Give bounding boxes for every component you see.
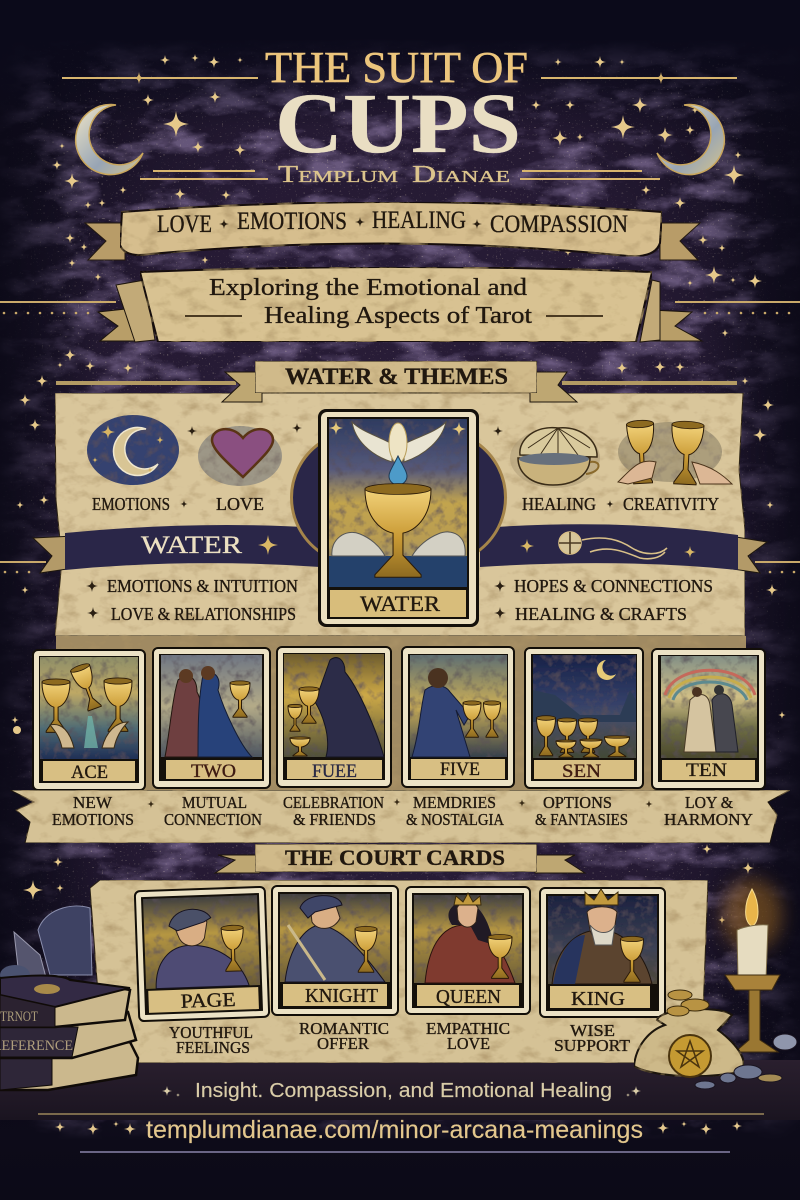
water list right: HEALING & CRAFTS <box>515 604 687 624</box>
card: five: FIVE <box>440 759 480 780</box>
subtitle: templum dianae <box>278 162 510 188</box>
caption: sen: OPTIONS <box>543 793 612 812</box>
title: the suit of: THE SUIT OF <box>265 43 528 92</box>
icon: coin bag with pentacle <box>634 990 744 1077</box>
arch ring behind central card <box>292 443 506 552</box>
caption: page: FEELINGS <box>176 1038 250 1057</box>
caption: five: & NOSTALGIA <box>406 810 505 829</box>
caption: king: SUPPORT <box>554 1036 631 1055</box>
card: fuee <box>277 647 391 787</box>
card clouds <box>332 532 465 556</box>
caption: king <box>554 1021 631 1055</box>
side rules with dots <box>0 301 800 314</box>
card: five <box>402 647 514 787</box>
blue water ribbon <box>33 524 767 573</box>
caption: fuee: CELEBRATION <box>283 793 384 812</box>
icon: stack of books <box>0 976 138 1090</box>
caption: king: WISE <box>570 1021 615 1040</box>
caption: queen: LOVE <box>447 1034 490 1053</box>
card label <box>330 590 466 617</box>
card: two: TWO <box>191 761 236 782</box>
central water card: WATER <box>360 591 440 616</box>
court cards row <box>135 886 665 1021</box>
tagline: Insight. Compassion, and Emotional Healing <box>195 1080 612 1102</box>
water list right: HOPES & CONNECTIONS <box>514 576 713 596</box>
caption: sen: & FANTASIES <box>535 810 628 829</box>
theme words: LOVE <box>157 211 212 238</box>
section header: water and themes <box>222 361 577 402</box>
caption: ten: HARMONY <box>664 810 753 829</box>
banner: subtitle scroll <box>98 267 702 342</box>
icon: knot ornament <box>559 532 667 559</box>
card: knight <box>272 886 398 1015</box>
icon: crystal cluster <box>0 906 92 985</box>
theme labels: LOVE <box>216 494 264 514</box>
theme labels <box>92 423 719 514</box>
caption: ace: EMOTIONS <box>52 810 134 829</box>
caption: knight <box>299 1019 389 1053</box>
card: queen: QUEEN <box>436 986 501 1008</box>
subtitle: templum dianae: Templum <box>278 162 398 188</box>
subtitle: templum dianae: Dianae <box>412 162 510 188</box>
caption: queen <box>426 1019 510 1053</box>
water heading: WATER <box>141 532 242 559</box>
caption strip for numbered cards <box>10 790 790 843</box>
dove <box>352 422 446 463</box>
panel: water and themes <box>55 381 746 792</box>
caption: sen <box>535 793 628 829</box>
caption: page: YOUTHFUL <box>169 1023 253 1042</box>
caption: five <box>406 793 505 829</box>
card: fuee: FUEE <box>312 761 357 782</box>
caption: fuee: & FRIENDS <box>293 810 376 829</box>
caption: ten <box>664 793 753 829</box>
icon: left crescent moon <box>76 105 143 175</box>
water list left <box>86 576 298 624</box>
theme words: COMPASSION <box>490 211 628 238</box>
caption: two <box>164 793 262 829</box>
caption: five: MEMDRIES <box>413 793 496 812</box>
card: knight: KNIGHT <box>305 985 378 1007</box>
numbered cards row <box>33 647 765 790</box>
caption: fuee <box>283 793 384 829</box>
banner: themes ribbon <box>85 202 700 260</box>
book spine text: TRNOT <box>0 1009 38 1025</box>
card: ten <box>652 649 765 789</box>
icon: candle on holder <box>722 879 782 1052</box>
caption: knight: OFFER <box>317 1034 370 1053</box>
icon: heart love <box>198 426 282 486</box>
water list left: EMOTIONS & INTUITION <box>107 576 298 596</box>
caption: ten: LOY & <box>685 793 733 812</box>
theme words: EMOTIONS <box>237 208 347 235</box>
card: ace <box>33 650 145 790</box>
theme labels: HEALING <box>522 494 596 514</box>
card: page <box>135 887 269 1021</box>
footer website link: templumdianae.com/minor-arcana-meanings <box>146 1116 643 1144</box>
title: cups: CUPS <box>275 75 521 171</box>
side rules mid <box>0 561 800 573</box>
card: sen <box>525 648 643 788</box>
caption: ace <box>52 793 134 829</box>
theme labels: EMOTIONS <box>92 494 170 514</box>
panel: court cards parchment <box>0 880 800 1120</box>
subtitle text: Exploring the Emotional and <box>209 275 527 301</box>
caption: two: CONNECTION <box>164 810 262 829</box>
caption: queen: EMPATHIC <box>426 1019 510 1038</box>
footer rule bottom <box>80 1151 730 1153</box>
card: queen <box>406 887 530 1014</box>
icon: right crescent moon <box>657 105 724 175</box>
icon: moon emotions <box>87 415 179 485</box>
card: king <box>540 888 665 1017</box>
card: two <box>153 648 270 788</box>
water drop <box>389 456 407 485</box>
footer rule top <box>38 1113 764 1115</box>
card sea <box>329 556 467 587</box>
card: sen: SEN <box>562 761 601 782</box>
caption: two: MUTUAL <box>182 793 247 812</box>
subtitle ornament lines <box>140 170 660 180</box>
theme words <box>157 207 628 238</box>
section header: court cards: THE COURT CARDS <box>285 845 505 870</box>
theme words: HEALING <box>372 207 466 234</box>
card: ten: TEN <box>686 760 727 781</box>
section header: water and themes: WATER & THEMES <box>285 364 508 389</box>
caption: page <box>169 1023 253 1057</box>
subtitle text second line: Healing Aspects of Tarot <box>264 303 532 329</box>
central water card <box>318 409 479 627</box>
section header: court cards <box>215 844 585 873</box>
card: page: PAGE <box>180 989 236 1013</box>
card: ace: ACE <box>71 762 108 783</box>
court captions <box>169 1019 631 1057</box>
card: king: KING <box>571 988 625 1010</box>
water list left: LOVE & RELATIONSHIPS <box>111 604 296 624</box>
caption: ace: NEW <box>73 793 113 812</box>
icon: scattered stones <box>695 1034 797 1089</box>
icon: shell and cup healing <box>510 428 600 488</box>
icon: goblets toast creativity <box>618 420 732 485</box>
theme labels: CREATIVITY <box>623 494 719 514</box>
water list right <box>494 576 713 624</box>
title ornament lines <box>62 72 737 84</box>
caption: knight: ROMANTIC <box>299 1019 389 1038</box>
grail <box>365 484 431 577</box>
